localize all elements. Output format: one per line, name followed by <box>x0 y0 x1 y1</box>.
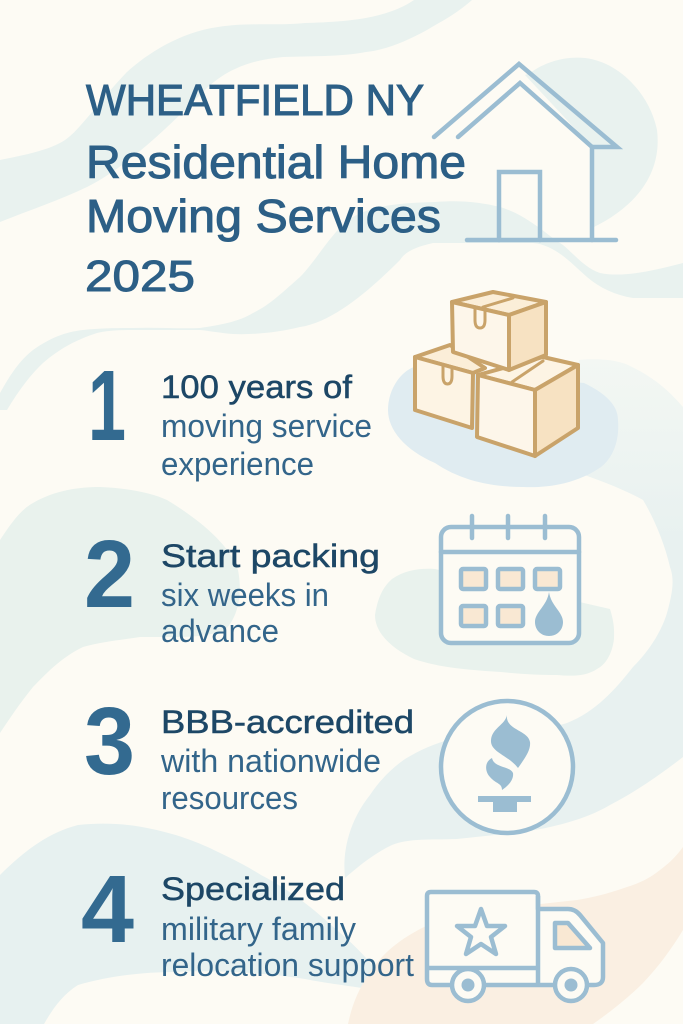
top box <box>452 292 546 370</box>
step 3 text: resources <box>161 780 298 816</box>
step 1 text: 100 years of <box>161 369 352 405</box>
step 2 <box>84 521 380 649</box>
water drop <box>535 592 563 636</box>
calendar frame <box>441 527 579 643</box>
step 3 text <box>160 704 414 816</box>
number 3: 3 <box>84 688 135 795</box>
step 2 text: six weeks in <box>161 577 329 613</box>
right box <box>477 357 578 456</box>
left box <box>415 345 485 428</box>
step 1 text: moving service <box>161 408 372 444</box>
title line 3: 2025 <box>85 252 195 301</box>
step 3 text: BBB-accredited <box>161 704 414 740</box>
icon: moving truck <box>427 892 603 1001</box>
step 1 text: experience <box>161 446 314 482</box>
step 4 text: military family <box>161 911 356 947</box>
title <box>85 76 466 301</box>
step 1 <box>88 350 372 482</box>
title line 2: Moving Services <box>86 190 441 242</box>
step 2 text: Start packing <box>161 538 380 574</box>
number 4: 4 <box>81 856 134 963</box>
title line: location: WHEATFIELD NY <box>86 76 424 125</box>
step 4 <box>81 856 414 983</box>
calendar cells <box>461 569 560 626</box>
step 4 text <box>161 871 414 983</box>
step 1 text <box>161 369 372 482</box>
icon: stacked boxes <box>415 292 578 456</box>
title line 1: Residential Home <box>86 136 466 188</box>
step 4 text: Specialized <box>161 871 345 907</box>
number 1: 1 <box>88 350 126 462</box>
icon: calendar <box>441 516 579 643</box>
number 2: 2 <box>84 521 135 628</box>
step 4 text: relocation support <box>161 947 414 983</box>
step 2 text <box>161 538 380 649</box>
icon: house <box>434 64 617 240</box>
step 3 text: with nationwide <box>160 743 381 779</box>
step 3 <box>84 688 414 816</box>
icon: BBB torch <box>441 701 573 833</box>
step 2 text: advance <box>161 613 279 649</box>
